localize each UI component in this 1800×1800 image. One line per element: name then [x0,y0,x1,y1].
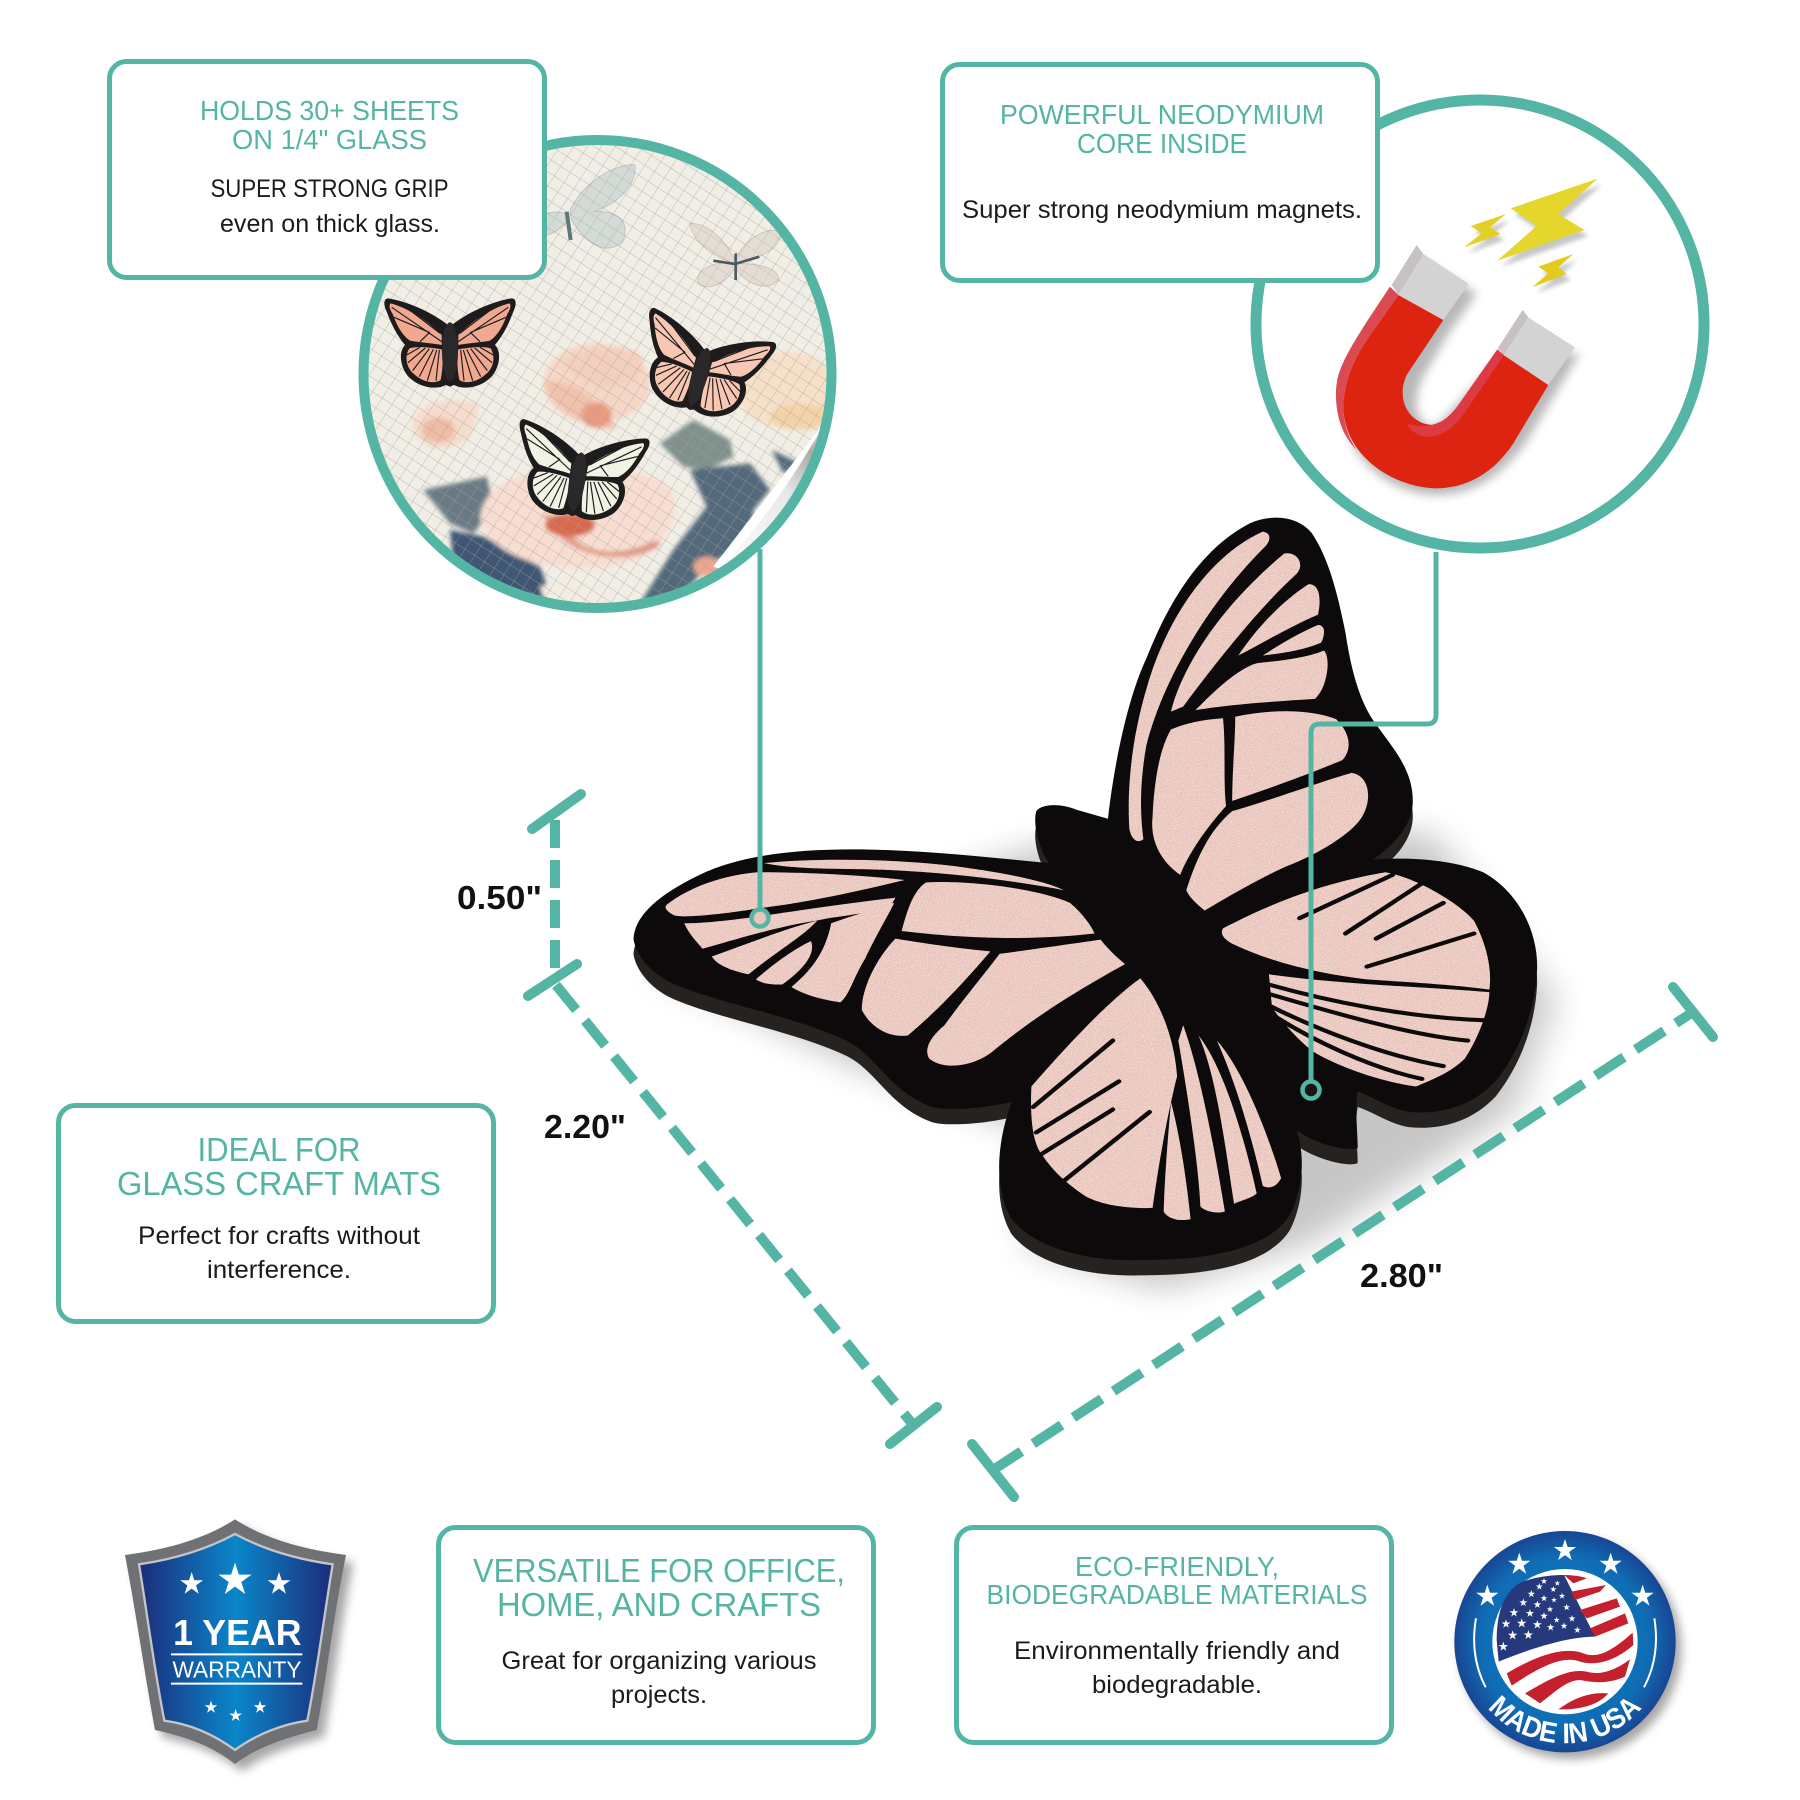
heading: holds 30+ sheets: ON 1/4" GLASS [232,124,427,155]
circle photo content [368,145,826,603]
heading: holds 30+ sheets: HOLDS 30+ SHEETS [200,95,459,126]
panel: neodymium magnet circle [1256,100,1704,548]
dimension: length 2.80 inch [972,987,1713,1497]
body: environmentally friendly: Environmentally friendly and [1014,1637,1340,1665]
dimension: width 2.20 inch [556,985,937,1444]
badge: made in usa seal [1454,1531,1687,1765]
body: organizing projects: Great for organizing various [502,1647,816,1675]
dimension label 0.50: 0.50" [457,879,542,916]
dimension label 2.20: 2.20" [544,1108,626,1145]
callout dot: left wing [752,910,768,926]
heading: powerful neodymium core: CORE INSIDE [1077,128,1247,159]
product: butterfly magnet [633,518,1555,1290]
flag inside seal [1497,1575,1633,1709]
circle ring [1256,100,1704,548]
panel: versatile for office home crafts [438,1528,874,1742]
heading: versatile: VERSATILE FOR OFFICE, [473,1552,845,1589]
heading: eco-friendly: BIODEGRADABLE MATERIALS [986,1579,1368,1610]
panel: ideal for glass craft mats [58,1106,494,1322]
heading: versatile: HOME, AND CRAFTS [497,1586,821,1623]
panel: eco-friendly materials [956,1528,1392,1742]
dimension: height 0.50 inch [528,794,581,996]
badge: 1 year warranty shield: WARRANTY [172,1656,301,1682]
panel: holds 30+ sheets [110,62,544,278]
body: organizing projects: projects. [611,1681,707,1709]
butterfly black wing veins [1033,875,1483,1183]
butterfly side thickness [633,533,1537,1276]
panel: powerful neodymium core [942,64,1378,280]
dimension label 2.80: 2.80" [1360,1257,1443,1294]
body: environmentally friendly: biodegradable. [1092,1671,1262,1699]
panel: glass mat photo circle [357,133,860,620]
circle ring [364,140,832,608]
heading: eco-friendly: ECO-FRIENDLY, [1075,1551,1279,1582]
body: neodymium magnets: Super strong neodymium magnets. [962,196,1362,224]
callout dot: right wing [1302,1082,1320,1098]
butterfly wing panes [666,532,1490,1220]
body: super strong grip: SUPER STRONG GRIP [210,175,448,203]
mini butterfly magnets [384,298,777,527]
badge: 1 year warranty shield [125,1519,353,1771]
butterfly soft shadow [652,832,1555,1290]
callout line: glass mat circle to butterfly dot [758,549,762,910]
badge: 1 year warranty shield: 1 YEAR [173,1612,302,1653]
heading: ideal for glass craft mats: GLASS CRAFT MATS [117,1165,441,1202]
body: crafts without interference: Perfect for crafts without [138,1222,420,1250]
icon: horseshoe magnet and lightning bolts [1336,179,1602,495]
butterfly top surface [633,518,1537,1260]
callout line: magnet circle to butterfly dot [1311,552,1436,1082]
heading: ideal for glass craft mats: IDEAL FOR [198,1131,360,1168]
body: super strong grip: even on thick glass. [220,210,440,238]
badge: made in usa seal: MADE IN USA [1488,1695,1642,1744]
heading: powerful neodymium core: POWERFUL NEODYMIUM [1000,99,1324,130]
body: crafts without interference: interference. [207,1256,351,1284]
